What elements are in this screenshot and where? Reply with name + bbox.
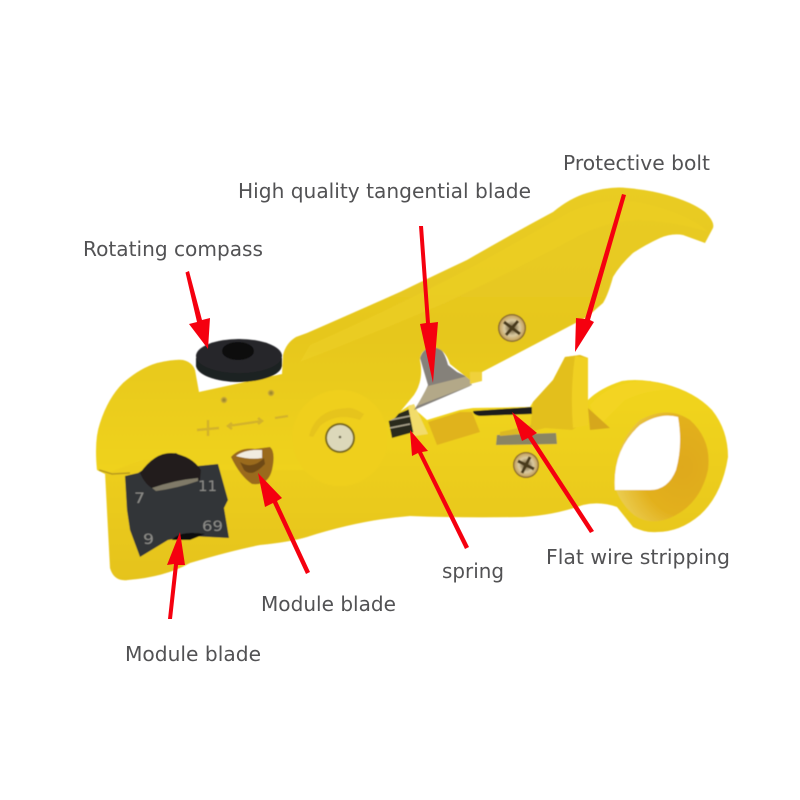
- embossed adjustment marks: [197, 390, 288, 436]
- label: Flat wire stripping: Flat wire stripping: [546, 545, 730, 569]
- ring hole: [615, 416, 680, 490]
- label: spring: spring: [442, 559, 504, 583]
- flat wire black strip: [473, 407, 532, 416]
- pivot disc: [292, 390, 388, 486]
- upper jaw tip: [470, 372, 482, 384]
- seam between jaws: [99, 470, 130, 474]
- rotating compass knob: [196, 339, 282, 382]
- label: Module blade (left): Module blade: [125, 642, 261, 666]
- protective bolt: [530, 355, 588, 432]
- arrow: flat wire stripping: [512, 412, 594, 533]
- arrow: module blade left: [167, 532, 185, 619]
- arrow: module blade middle: [258, 473, 310, 574]
- lower screw: [513, 452, 539, 478]
- label: Rotating compass: Rotating compass: [83, 237, 263, 261]
- label: Module blade (middle): Module blade: [261, 592, 396, 616]
- ring highlight: [590, 381, 680, 425]
- front module block: 11: [198, 479, 217, 495]
- front module block: 9: [143, 532, 154, 548]
- arrow: protective bolt: [575, 194, 626, 352]
- arrow: spring: [410, 430, 469, 549]
- tool lower jaw and ring handle: [105, 355, 728, 580]
- arrow: tangential blade: [419, 226, 438, 383]
- label: Protective bolt: Protective bolt: [563, 151, 710, 175]
- module numbers: 7: [134, 491, 145, 507]
- ring inner wall: [616, 412, 709, 521]
- tool upper body: [96, 188, 713, 474]
- upper highlight band: [300, 201, 708, 362]
- tangential blade: [414, 347, 472, 410]
- tool illustration: [96, 188, 728, 580]
- front module block: 69: [202, 519, 223, 535]
- module blade recess: [231, 447, 274, 484]
- arrow: rotating compass: [186, 271, 210, 349]
- channel notch: [428, 412, 480, 445]
- front module block: [125, 453, 229, 557]
- label: High quality tangential blade: High quality tangential blade: [238, 179, 531, 203]
- spring: [388, 404, 428, 438]
- upper screw: [498, 314, 526, 342]
